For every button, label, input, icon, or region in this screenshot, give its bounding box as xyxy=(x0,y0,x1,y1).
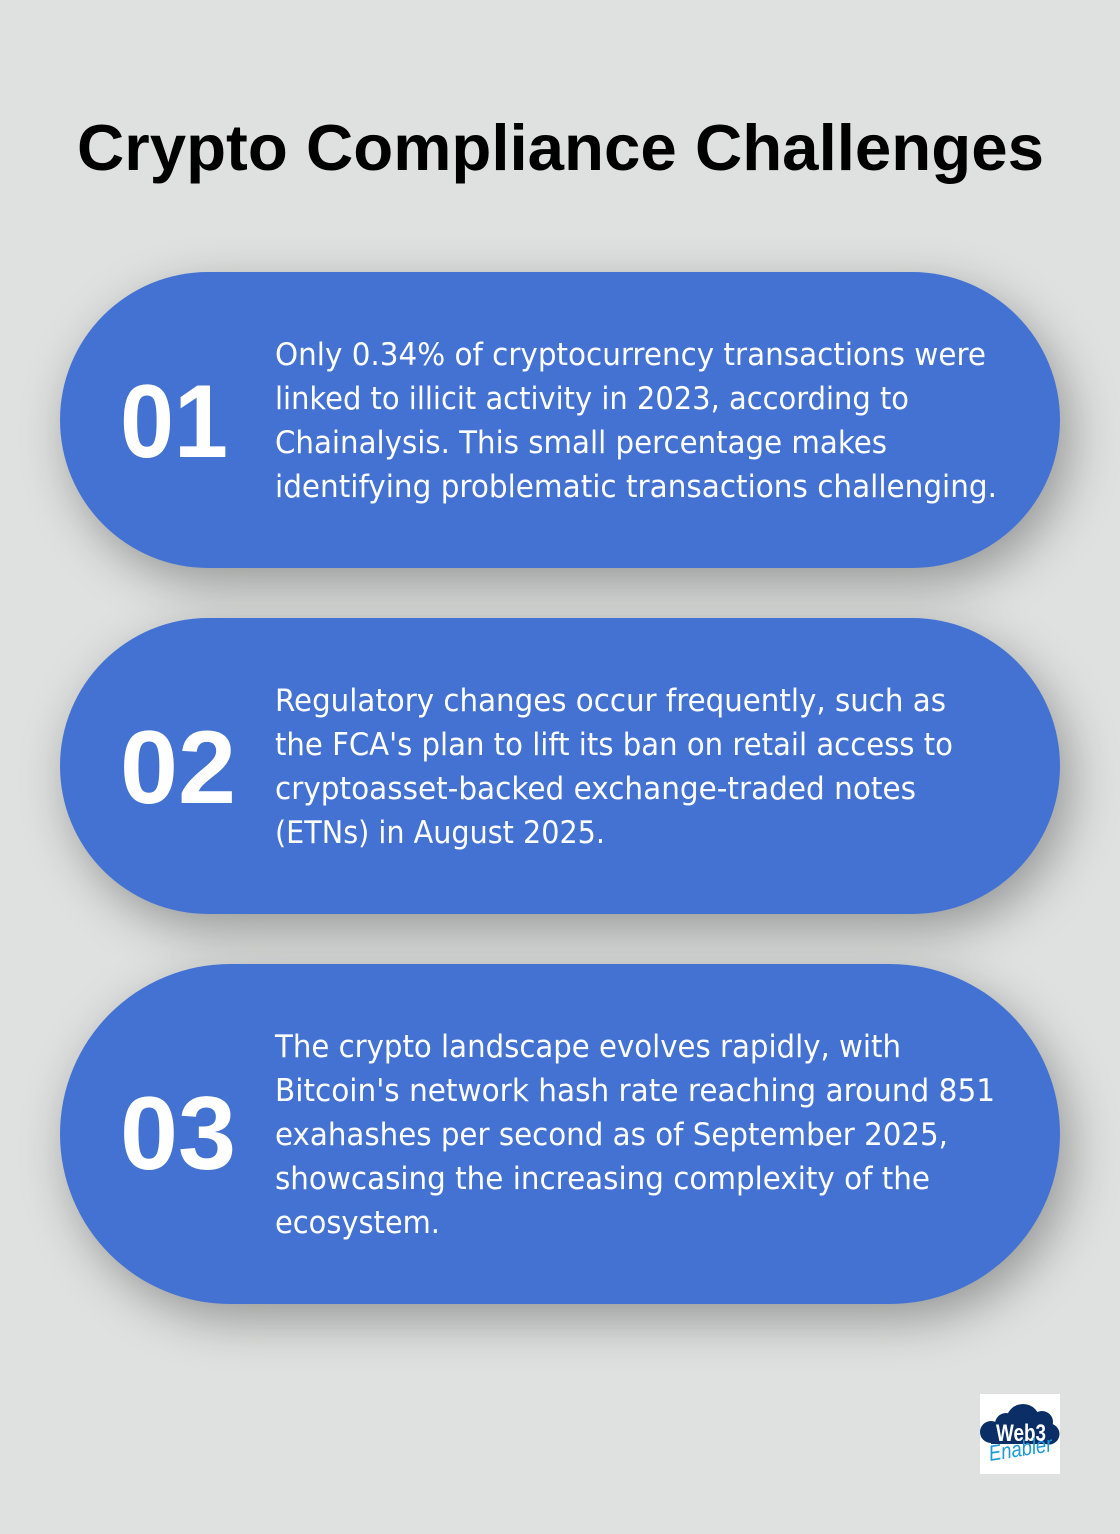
text block 01: Chainalysis. This small percentage makes xyxy=(275,425,887,461)
text block 03: exahashes per second as of September 2025, xyxy=(275,1117,948,1153)
text block 02 xyxy=(275,683,953,851)
text block 02: Regulatory changes occur frequently, such as xyxy=(275,683,946,719)
text block 01: Only 0.34% of cryptocurrency transactions were xyxy=(275,337,986,373)
text block 01: identifying problematic transactions challenging. xyxy=(275,469,997,505)
text block 03 xyxy=(274,1029,995,1241)
panel: challenge 01 xyxy=(60,272,1060,568)
text block 03: showcasing the increasing complexity of the xyxy=(275,1161,930,1197)
panel: challenge 02 xyxy=(60,618,1060,914)
text block 03: The crypto landscape evolves rapidly, with xyxy=(274,1029,901,1065)
text block 01: linked to illicit activity in 2023, according to xyxy=(275,381,909,417)
text block 03: ecosystem. xyxy=(275,1205,440,1241)
icon: Web3 Enabler logo: Web3 xyxy=(996,1420,1046,1447)
icon: Web3 Enabler logo xyxy=(980,1394,1060,1474)
text block 02: (ETNs) in August 2025. xyxy=(275,815,605,851)
text block 03: Bitcoin's network hash rate reaching around 851 xyxy=(275,1073,995,1109)
text block 02: the FCA's plan to lift its ban on retail access to xyxy=(275,727,953,763)
title: Crypto Compliance Challenges xyxy=(77,111,1044,184)
number 03: 03 xyxy=(120,1076,236,1192)
number 02: 02 xyxy=(120,710,236,826)
card background 03 xyxy=(60,964,1060,1304)
card background 02 xyxy=(60,618,1060,914)
text block 02: cryptoasset-backed exchange-traded notes xyxy=(275,771,916,807)
panel: challenge 03 xyxy=(60,964,1060,1304)
text block 01 xyxy=(275,337,997,505)
number 01: 01 xyxy=(120,364,228,480)
card background 01 xyxy=(60,272,1060,568)
icon: Web3 Enabler logo: Enabler xyxy=(987,1431,1055,1466)
